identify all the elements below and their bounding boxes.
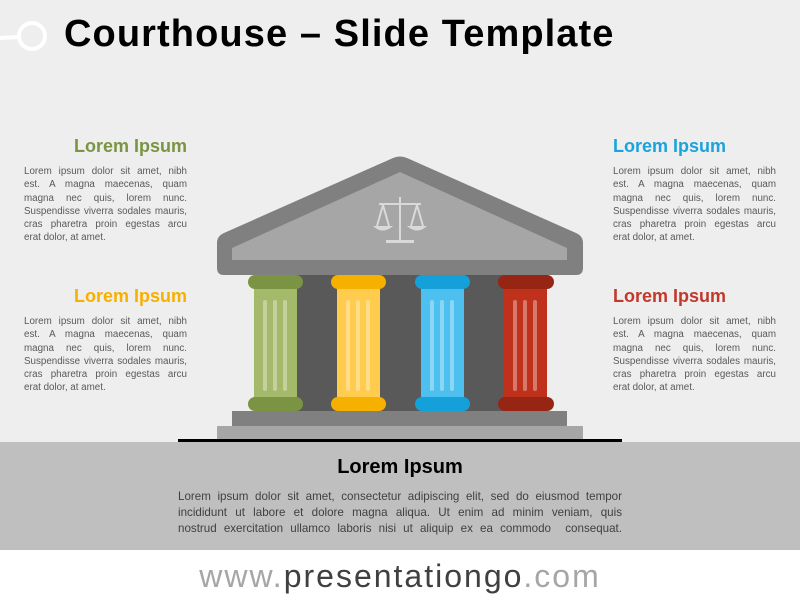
bottom text block: incididunt ut labore et dolore magna aliqua. Ut enim ad minim veniam, quis — [178, 506, 622, 519]
text block: top left: est. A magna maecenas, quam — [24, 179, 187, 190]
text block: top left: magna nec quis, lorem nunc. — [24, 193, 187, 204]
text block: bottom left: Lorem Ipsum — [74, 286, 187, 306]
text block: top right: erat dolor, at amet. — [613, 232, 695, 243]
footer url: www.presentationgo.com — [199, 558, 601, 594]
logo icon — [0, 21, 47, 51]
text block: bottom right: Lorem ipsum dolor sit amet, nibh — [613, 316, 776, 327]
text block: top left: Lorem Ipsum — [74, 136, 187, 156]
text block: top right: est. A magna maecenas, quam — [613, 179, 776, 190]
text block: top left: erat dolor, at amet. — [24, 232, 106, 243]
text block: top right: Lorem Ipsum — [613, 136, 726, 156]
columns — [248, 275, 554, 411]
title: Courthouse – Slide Template — [64, 13, 615, 55]
text block: bottom right: Lorem Ipsum — [613, 286, 726, 306]
bottom text block: Lorem ipsum dolor sit amet, consectetur adipiscing elit, sed do eiusmod tempor — [178, 490, 622, 503]
text block: bottom left: magna nec quis, lorem nunc. — [24, 343, 187, 354]
text block: top left: cras pharetra proin egestas arcu — [24, 219, 187, 230]
text block: bottom right: Suspendisse viverra sodales mauris, — [613, 356, 776, 367]
text block: top left — [24, 136, 187, 243]
text block: bottom left: Suspendisse viverra sodales mauris, — [24, 356, 187, 367]
text block: bottom left: erat dolor, at amet. — [24, 382, 106, 393]
text block: top left: Suspendisse viverra sodales mauris, — [24, 206, 187, 217]
text block: bottom right: est. A magna maecenas, quam — [613, 329, 776, 340]
text block: top right: Lorem ipsum dolor sit amet, nibh — [613, 166, 776, 177]
text block: bottom left — [24, 286, 187, 393]
text block: top right: Suspendisse viverra sodales mauris, — [613, 206, 776, 217]
bottom text block: Lorem Ipsum — [337, 456, 463, 478]
text block: top right: cras pharetra proin egestas arcu — [613, 219, 776, 230]
bottom text block: nostrud exercitation ullamco laboris nisi ut aliquip ex ea commodo consequat. — [178, 522, 622, 535]
text block: top left: Lorem ipsum dolor sit amet, nibh — [24, 166, 187, 177]
text block: top right — [613, 136, 776, 243]
courthouse illustration — [178, 156, 622, 442]
text block: bottom right: cras pharetra proin egestas arcu — [613, 369, 776, 380]
text block: bottom right: magna nec quis, lorem nunc. — [613, 343, 776, 354]
text block: bottom left: Lorem ipsum dolor sit amet, nibh — [24, 316, 187, 327]
icon: scales — [376, 197, 424, 243]
bottom text block — [178, 456, 622, 535]
text block: bottom right — [613, 286, 776, 393]
text block: bottom left: cras pharetra proin egestas arcu — [24, 369, 187, 380]
text block: top right: magna nec quis, lorem nunc. — [613, 193, 776, 204]
text block: bottom right: erat dolor, at amet. — [613, 382, 695, 393]
steps — [232, 411, 567, 426]
roof — [217, 156, 583, 275]
text block: bottom left: est. A magna maecenas, quam — [24, 329, 187, 340]
